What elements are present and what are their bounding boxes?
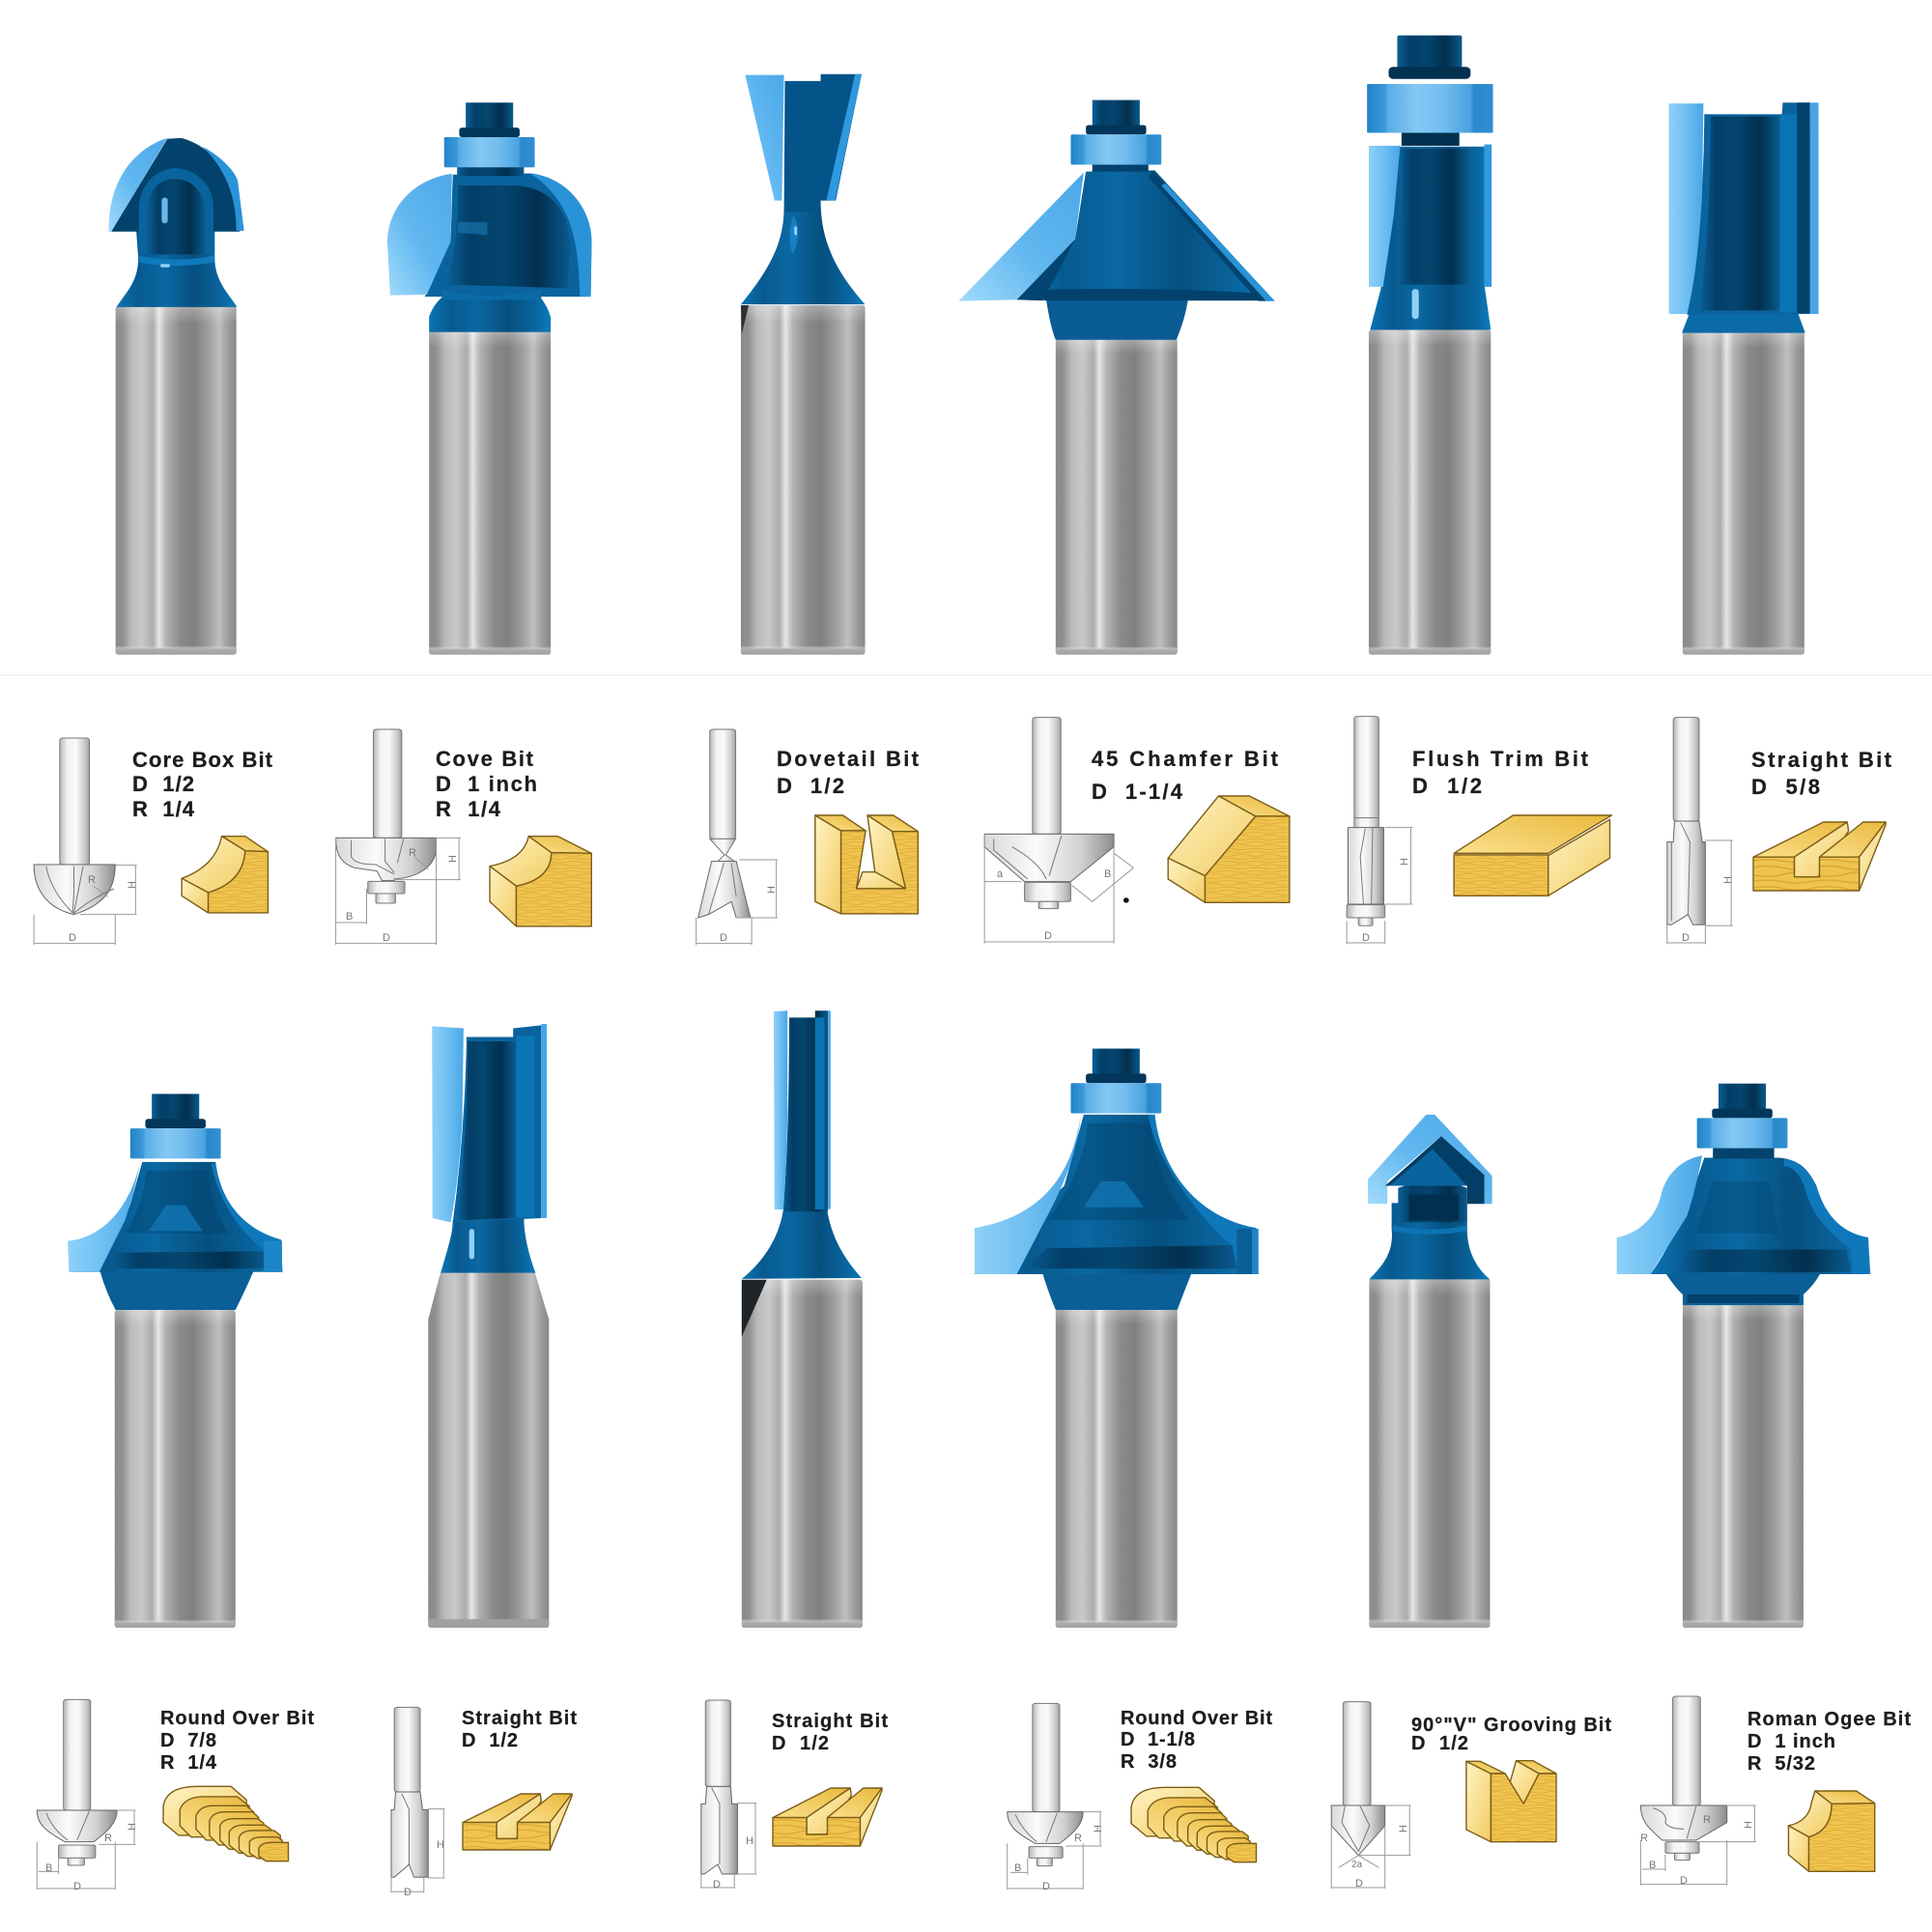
diagram: V grooving bit: D [1355,1878,1363,1889]
panel: cove bit spec [336,729,591,945]
diagram: cove bit: H [447,855,459,863]
diagram: dovetail bit [696,729,778,945]
diagram: V grooving bit: H [1398,1825,1409,1833]
diagram: flush trim bit: D [1362,932,1370,944]
spec: diameter: D 5/8 [1751,775,1820,799]
diagram: 45 chamfer bit: D [1044,930,1052,942]
wood sample: core box profile [182,837,268,913]
diagram: straight bit 1/2 [391,1707,444,1898]
diagram: flush trim bit: H [1399,858,1410,866]
panel: straight bit 1/2 second spec [701,1700,888,1890]
panel: dovetail bit spec [696,729,920,945]
diagram: round over bit 7/8 [37,1699,138,1892]
wood sample: straight groove [1753,822,1886,891]
diagram: straight bit 5/8: D [1682,932,1690,944]
spec: diameter: D 1/2 [1412,774,1482,798]
title: roman ogee bit: Roman Ogee Bit [1747,1709,1911,1730]
diagram: roman ogee bit [1640,1696,1756,1887]
bit: dovetail bit render [741,74,866,655]
bit: straight bit 5/8 render [1669,102,1819,655]
spec: diameter: D 7/8 [160,1730,216,1751]
diagram: round over bit 1-1/8: H [1093,1825,1104,1833]
wood sample: dovetail groove [815,815,918,914]
title: core box bit: Core Box Bit [132,748,273,772]
spec: diameter: D 1/2 [462,1730,518,1751]
diagram: dovetail bit: D [720,932,727,944]
bit: 45 chamfer bit render [958,100,1275,655]
diagram: straight bit 1/2 second [701,1700,756,1890]
wood sample: V groove [1466,1761,1556,1842]
bit: round over bit 7/8 render [68,1094,282,1628]
wood sample: chamfer profile [1168,796,1290,902]
diagram: roman ogee bit: B [1649,1860,1656,1871]
title: flush trim bit: Flush Trim Bit [1412,747,1589,771]
panel: straight bit 1/2 spec [391,1707,577,1898]
wood sample: round over profile [163,1786,288,1861]
diagram: straight bit 1/2: D [404,1887,412,1898]
diagram: core box bit [34,738,138,945]
diagram: 45 chamfer bit: a [997,868,1004,880]
panel: straight bit 5/8 spec [1667,718,1892,944]
bit: straight bit 1/2 render [428,1024,549,1628]
diagram: dovetail bit: H [766,886,778,894]
diagram: straight bit 1/2 second: D [713,1879,721,1890]
bit: 90 degree V grooving bit render [1368,1115,1492,1628]
diagram: straight bit 5/8: H [1722,876,1734,884]
bit: straight bit 1/2 narrow render [742,1010,863,1628]
spec: diameter: D 1/2 [772,1733,829,1754]
diagram: roman ogee bit: R [1640,1833,1648,1844]
diagram: V grooving bit [1331,1702,1410,1889]
diagram: straight bit 1/2: H [437,1839,444,1851]
spec: radius: R 1/4 [160,1752,217,1774]
bit: flush trim bit render [1367,36,1493,655]
diagram: cove bit: B [346,911,353,923]
panel: core box bit spec [34,738,273,945]
diagram: roman ogee bit: D [1680,1875,1688,1887]
panel: flush trim bit spec [1347,717,1611,944]
diagram: flush trim bit [1347,717,1412,944]
diagram: core box bit: D [69,932,76,944]
spec: radius: R 1/4 [436,797,501,821]
title: dovetail bit: Dovetail Bit [777,747,920,771]
wood sample: straight groove [463,1794,572,1850]
diagram: roman ogee bit: H [1743,1821,1754,1829]
diagram: round over bit 7/8: R [104,1833,112,1844]
diagram: round over bit 7/8: H [127,1823,138,1831]
title: straight bit: Straight Bit [462,1708,577,1729]
diagram: cove bit: R [409,847,416,859]
diagram: cove bit: D [383,932,390,944]
spec: radius: R 3/8 [1121,1751,1177,1773]
diagram: cove bit [336,729,461,945]
diagram: roman ogee bit: R [1703,1814,1711,1826]
title: V grooving bit: 90°"V" Grooving Bit [1411,1715,1611,1736]
panel: round over bit 1-1/8 spec [1008,1703,1272,1892]
diagram: round over bit 1-1/8: R [1074,1833,1082,1844]
bit: roman ogee bit render [1617,1084,1870,1628]
spec: diameter: D 1/2 [1411,1733,1468,1754]
bit: cove bit render [387,102,591,655]
spec: radius: R 5/32 [1747,1753,1815,1775]
diagram: core box bit: R [88,874,96,886]
spec: diameter: D 1 inch [436,772,537,796]
diagram: straight bit 5/8 [1667,718,1734,944]
panel: roman ogee bit spec [1640,1696,1911,1887]
diagram: round over bit 1-1/8 [1008,1703,1104,1892]
title: cove bit: Cove Bit [436,747,534,771]
diagram: round over bit 7/8: D [73,1881,81,1892]
diagram: round over bit 1-1/8: D [1042,1881,1050,1892]
diagram: round over bit 1-1/8: B [1014,1862,1021,1874]
title: straight bit: Straight Bit [1751,748,1892,772]
diagram: 45 chamfer bit: B [1104,868,1111,880]
panel: 45 chamfer bit spec [984,718,1290,944]
wood sample: round over profile [1131,1787,1256,1862]
diagram: round over bit 7/8: B [45,1862,52,1874]
bit: round over bit 1-1/8 render [974,1049,1259,1628]
wood sample: cove profile [490,837,591,926]
wood sample: ogee profile [1788,1791,1875,1871]
spec: diameter: D 1 inch [1747,1731,1835,1752]
title: round over bit: Round Over Bit [160,1708,314,1729]
spec: diameter: D 1/2 [777,774,844,798]
panel: V grooving bit spec [1331,1702,1611,1889]
spec: diameter: D 1-1/4 [1092,780,1183,804]
spec: diameter: D 1/2 [132,772,194,796]
spec: diameter: D 1-1/8 [1121,1729,1195,1750]
diagram: V grooving bit: 2a [1351,1860,1363,1870]
title: round over bit: Round Over Bit [1121,1708,1272,1729]
bit: core box bit render [108,138,244,655]
diagram: straight bit 1/2 second: H [746,1835,753,1847]
diagram: 45 chamfer bit [984,718,1133,944]
diagram: core box bit: H [127,881,138,889]
panel: round over bit 7/8 spec [37,1699,314,1892]
wood sample: straight groove [773,1788,882,1846]
title: straight bit: Straight Bit [772,1711,888,1732]
spec: radius: R 1/4 [132,797,195,821]
title: 45 chamfer bit: 45 Chamfer Bit [1092,747,1279,771]
wood sample: flush trim block [1454,815,1611,895]
